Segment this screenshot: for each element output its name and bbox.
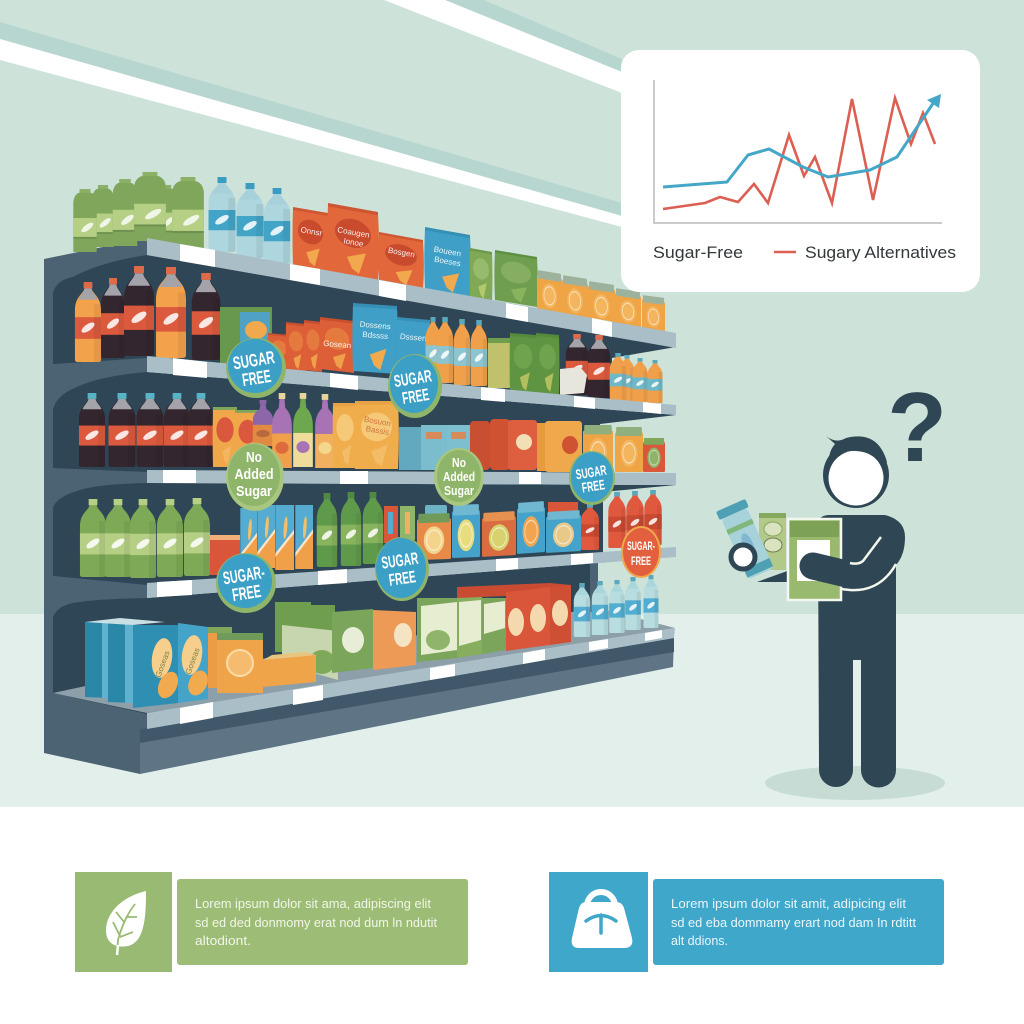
chart axes — [654, 80, 942, 223]
legend: sugar-free: Sugar-Free — [653, 243, 743, 262]
orange packs — [537, 421, 582, 472]
product: jar in hand — [716, 499, 776, 580]
bottom shelf surface — [53, 608, 675, 713]
green jugs — [73, 172, 204, 252]
badge: sugar free 5 — [375, 537, 429, 601]
badge: sugar free 2 — [388, 354, 442, 418]
arm — [813, 537, 896, 590]
badge: sugar free 4: FREE — [231, 581, 262, 605]
wall background — [0, 0, 1024, 614]
products: bottom shelf — [85, 575, 658, 708]
snack bags: Ionoe — [343, 236, 365, 249]
orange bottles — [426, 317, 487, 386]
product: green pack — [759, 513, 786, 570]
badge: sugar free 4 — [216, 553, 276, 613]
badge: sugar free 2: SUGAR — [393, 366, 433, 391]
products: third shelf — [79, 393, 665, 472]
snack bags: Boeses — [434, 255, 461, 268]
text block: Lorem ipsum dolor sit amit, adipicing elit — [671, 897, 907, 911]
jars — [583, 425, 665, 472]
snack bags: Onnsr — [300, 225, 323, 238]
person shadow — [765, 766, 945, 800]
badge: no added sugar 1: Sugar — [236, 483, 272, 500]
small orange bottles — [610, 353, 662, 403]
green juice bottles — [80, 498, 210, 578]
badge: no added sugar 1: Added — [234, 466, 274, 483]
low orange carton — [263, 652, 316, 687]
badge: no added sugar 2 — [434, 448, 484, 506]
products: third shelf: Bassis — [365, 424, 390, 437]
text block — [177, 879, 468, 965]
products: second shelf: Bdssss — [362, 330, 388, 341]
red packs — [470, 419, 537, 470]
snack bags: Coaugen — [337, 225, 370, 240]
text block: sd ed eba dommamy erart nod dam In rdtitt — [671, 916, 917, 930]
white snack bag — [560, 367, 587, 395]
panel: line chart — [621, 50, 980, 292]
badge: sugar free red: SUGAR- — [627, 539, 655, 553]
legend: sugary alternatives: Sugary Alternatives — [805, 243, 956, 262]
question mark: ? — [887, 372, 947, 482]
orange snack bags — [213, 407, 260, 467]
other arm behind products — [757, 570, 825, 582]
orange jars — [537, 270, 665, 333]
badge: sugar free 5: FREE — [388, 567, 417, 590]
badge: no added sugar 1 — [226, 443, 284, 511]
green glass bottles — [317, 492, 383, 567]
green box — [220, 307, 272, 365]
shelf lips with price tags — [147, 238, 676, 729]
snack bags — [292, 203, 538, 307]
badge: no added sugar 2: No — [452, 455, 466, 470]
cola bottles — [79, 393, 214, 467]
text block: sd ed ded donmomy erat nod dum ln ndutit — [195, 916, 438, 930]
icon: leaf — [75, 872, 172, 972]
blue cartons — [399, 425, 470, 470]
yellow snack bags — [333, 401, 399, 469]
product: green package held — [788, 519, 841, 600]
ceiling light strip: left — [0, 22, 622, 227]
panel: blue info — [549, 872, 944, 972]
small cartons — [384, 506, 415, 543]
products: second shelf: Dsssen — [400, 332, 427, 343]
red cartons — [457, 583, 571, 651]
text block: Lorem ipsum dolor sit ama, adipiscing elit — [195, 897, 432, 911]
panel: green info — [75, 872, 468, 972]
products: second shelf — [75, 266, 662, 403]
preserve jars — [417, 501, 581, 560]
white footer — [0, 807, 1024, 1024]
badge: sugar free 4: SUGAR- — [221, 562, 266, 588]
ceiling light strip: right — [384, 0, 622, 93]
badge: sugar free red: FREE — [631, 554, 651, 568]
dark cola bottles — [566, 334, 610, 398]
blue cereal boxes: Goseas — [154, 650, 172, 679]
badge: no added sugar 2: Sugar — [444, 483, 474, 498]
head — [823, 436, 889, 508]
badge: sugar free 3: FREE — [581, 476, 606, 496]
text block: alt ddions. — [671, 934, 728, 948]
line: sugary alternatives — [663, 98, 935, 209]
base plinth — [140, 638, 674, 774]
text block — [653, 879, 944, 965]
orange packages — [208, 627, 263, 693]
snack bags: Boueen — [433, 245, 462, 258]
body and legs — [818, 515, 905, 788]
products: top shelf — [73, 172, 665, 333]
text block: altodiont. — [195, 934, 251, 948]
green and white cartons — [417, 597, 506, 662]
line: sugar-free with arrow — [663, 94, 941, 187]
blue snack bags — [352, 303, 431, 380]
badge: sugar free red — [621, 526, 661, 578]
badge: no added sugar 2: Added — [443, 469, 475, 484]
badge: sugar free 3 — [569, 451, 615, 505]
blue cereal boxes — [85, 618, 212, 708]
back panels — [53, 255, 676, 714]
shopper figure — [716, 436, 905, 788]
badge: sugar free 1: FREE — [241, 366, 272, 390]
bay 4 right pillar — [590, 563, 598, 612]
flavored drink bottles — [253, 393, 335, 468]
products: fourth shelf — [80, 490, 662, 578]
badge: no added sugar 1: No — [246, 449, 262, 466]
snack bags: Bosgen — [387, 246, 416, 259]
blue and orange cartons — [240, 505, 313, 570]
orange carton — [373, 610, 416, 670]
cola and orange soda bottles — [75, 266, 220, 362]
badge: sugar free 5: SUGAR — [380, 549, 419, 573]
badge: sugar free 1 — [226, 338, 286, 398]
green packs — [488, 333, 559, 395]
products: third shelf: Bosuon — [363, 415, 392, 428]
water bottles — [208, 177, 290, 263]
products: second shelf: Dossens — [359, 320, 391, 331]
shelving unit — [44, 172, 676, 774]
badge: sugar free 3: SUGAR — [575, 462, 608, 482]
red bottles — [581, 490, 662, 550]
red snack bags — [268, 317, 355, 373]
red pack — [210, 535, 256, 575]
shelf frame — [44, 238, 147, 774]
badge: sugar free 1: SUGAR — [231, 347, 276, 373]
green packs — [275, 602, 373, 680]
water bottles — [574, 575, 658, 637]
blue cereal boxes: Goseas — [184, 647, 202, 676]
products: second shelf: Gosean — [323, 339, 352, 350]
badge: sugar free 2: FREE — [401, 385, 430, 408]
icon: shopping bag — [549, 872, 648, 972]
magnifier ring — [731, 545, 755, 569]
floor — [0, 614, 1024, 808]
